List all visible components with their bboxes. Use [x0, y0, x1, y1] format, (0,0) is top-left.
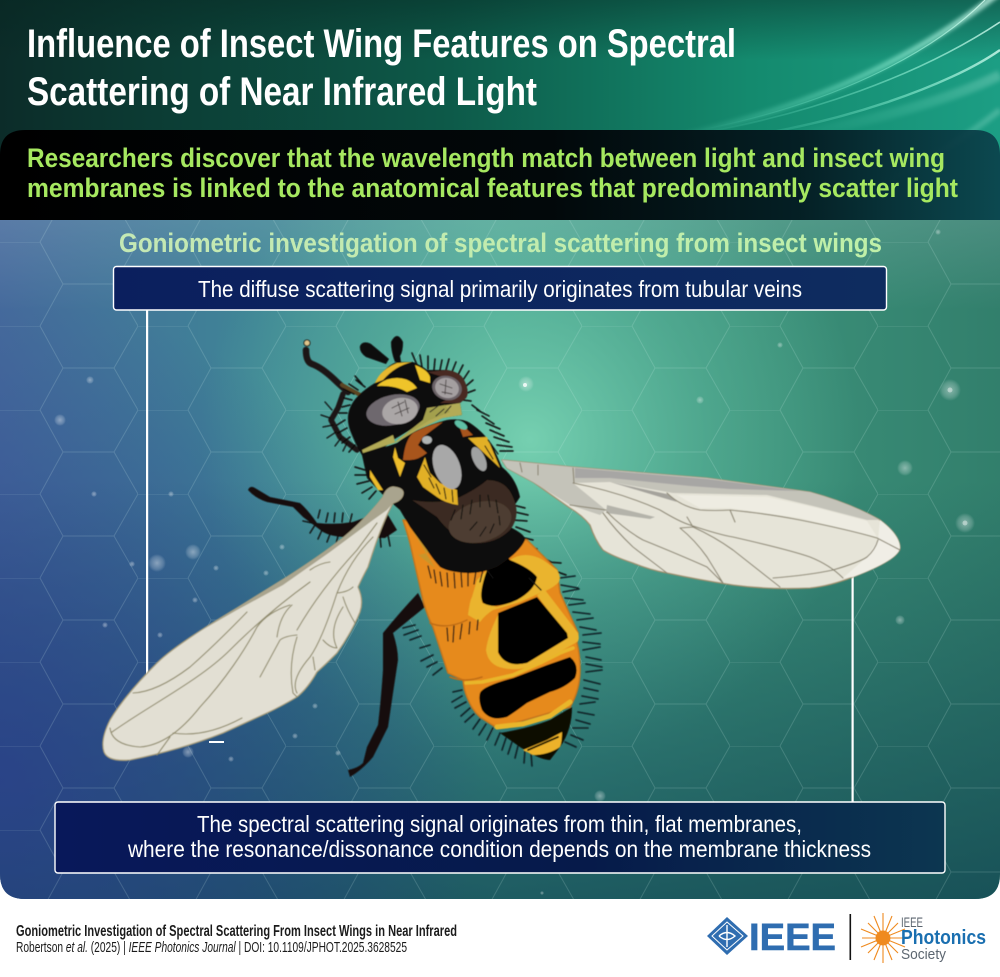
subtitle text: [27, 143, 958, 203]
connector line: membranes callout: [852, 570, 854, 804]
bokeh particles: [54, 229, 975, 895]
connector line: veins callout: [146, 310, 224, 743]
header band: [0, 0, 1000, 222]
logo: IEEE Photonics Society: Society: [901, 946, 946, 963]
footer citation: [16, 923, 457, 956]
right wing: [502, 460, 900, 589]
insect illustration: [103, 336, 900, 777]
abdomen hairs: [403, 576, 602, 766]
callout: membranes: where the resonance/dissonance condition depends on the membrane thickness: [127, 836, 871, 862]
logo: IEEE: [707, 917, 836, 959]
title: Scattering of Near Infrared Light: [27, 70, 537, 114]
leg: rear left: [248, 487, 397, 538]
callout: veins: [114, 266, 886, 310]
main illustrated panel background: [0, 220, 1000, 899]
callout: veins: The diffuse scattering signal primarily originates from tubular veins: [198, 276, 802, 302]
logo: IEEE Photonics Society: [861, 913, 986, 963]
footer citation: Robertson et al. (2025) | IEEE Photonics Journal | DOI: 10.1109/JPHOT.2025.3628525: [16, 939, 407, 956]
subtitle panel: [0, 130, 1000, 220]
section heading: Goniometric investigation of spectral scattering from insect wings: [119, 228, 882, 258]
logo divider: [850, 914, 851, 960]
title: [27, 22, 736, 114]
title: Influence of Insect Wing Features on Spectral: [27, 22, 736, 66]
leg: rear right: [348, 593, 425, 777]
footer citation: Goniometric Investigation of Spectral Scattering From Insect Wings in Near Infrared: [16, 923, 457, 940]
thorax: [362, 418, 525, 573]
callout: membranes: [55, 802, 945, 873]
logo: IEEE Photonics Society: IEEE: [901, 915, 923, 930]
leg: front: [304, 340, 362, 451]
head: [348, 362, 468, 463]
leg hairs: [303, 510, 390, 547]
callout: membranes: The spectral scattering signal originates from thin, flat membranes,: [197, 811, 802, 837]
left wing: [103, 487, 403, 760]
abdomen black patches: [500, 707, 572, 760]
logo: IEEE Photonics Society: Photonics: [901, 927, 986, 949]
abdomen: [403, 520, 580, 760]
logo: IEEE: IEEE: [749, 917, 836, 959]
body hairs: [337, 353, 566, 575]
antennae: [360, 336, 403, 364]
